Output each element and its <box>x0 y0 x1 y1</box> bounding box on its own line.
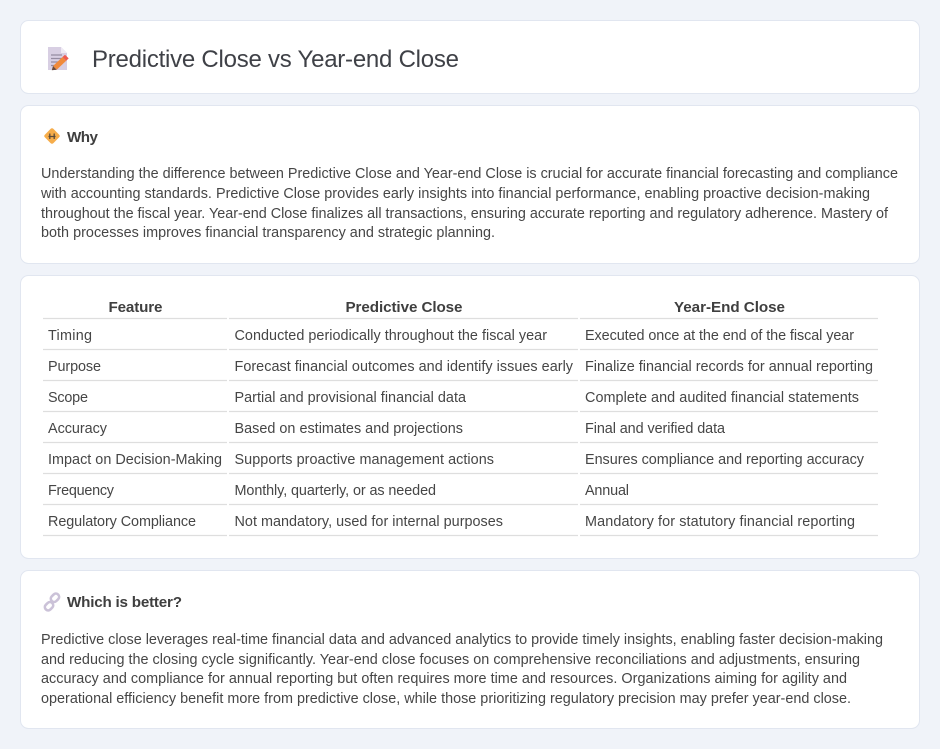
row: regulatory compliance: Not mandatory, used for internal purposes <box>234 514 503 530</box>
row: timing: Timing <box>48 328 92 344</box>
row: impact on decision-making <box>48 452 865 468</box>
row: regulatory compliance: Mandatory for statutory financial reporting <box>585 514 855 530</box>
row: scope: Scope <box>48 390 88 406</box>
title: Predictive Close vs Year-end Close <box>92 46 459 73</box>
text block: why: Understanding the difference between Predictive Close and Year-end Close is crucial for accurate financial forecasting and compliance <box>41 166 898 182</box>
row: timing: Executed once at the end of the fiscal year <box>585 328 854 344</box>
row: frequency: Frequency <box>48 483 115 499</box>
row: regulatory compliance: Regulatory Compliance <box>48 514 196 530</box>
row: regulatory compliance <box>48 514 855 530</box>
panel: header <box>20 20 920 94</box>
table header <box>108 299 785 316</box>
row: accuracy: Based on estimates and projections <box>234 421 463 437</box>
heading: why: Why <box>67 129 99 146</box>
row: frequency <box>48 483 629 499</box>
text block: which is better: operational efficiency benefit more from predictive close, while those prioritizing regulatory precision may prefer year-end close. <box>41 691 851 707</box>
row: purpose: Purpose <box>48 359 101 375</box>
row: timing <box>48 328 854 344</box>
text block: which is better <box>41 632 883 707</box>
table header: Predictive Close <box>346 299 462 316</box>
row: scope: Complete and audited financial statements <box>585 390 859 406</box>
text block: which is better: Predictive close leverages real-time financial data and advanced analytics to provide timely insights, enabling faster decision-making <box>41 632 883 648</box>
panel: comparison table <box>20 276 920 558</box>
table header: Year-End Close <box>674 299 785 316</box>
text block: which is better: and reducing the closing cycle significantly. Year-end close focuses on comprehensive reconciliations and adjustments, ensuring <box>41 652 860 668</box>
row: timing: Conducted periodically throughout the fiscal year <box>234 328 547 344</box>
panel: why <box>20 106 920 264</box>
row: impact on decision-making: Ensures compliance and reporting accuracy <box>585 452 865 468</box>
row: scope <box>48 390 859 406</box>
text block: why: with accounting standards. Predictive Close provides early insights into financial performance, enabling proactive decision-making <box>40 186 870 202</box>
panel: which is better <box>20 570 920 728</box>
heading: which is better: Which is better? <box>67 594 182 611</box>
icon: link <box>44 592 60 612</box>
text block: why <box>40 166 898 241</box>
table header: Feature <box>108 299 162 316</box>
row: accuracy: Final and verified data <box>585 421 725 437</box>
icon: warning diamond <box>44 128 60 144</box>
row: purpose <box>48 359 873 375</box>
text block: why: both processes improves financial transparency and strategic planning. <box>41 225 495 241</box>
row: scope: Partial and provisional financial data <box>234 390 466 406</box>
row: frequency: Annual <box>585 483 629 499</box>
row: impact on decision-making: Supports proactive management actions <box>234 452 494 468</box>
text block: which is better: accuracy and compliance for annual reporting but often requires more time and resources. Organizations aiming for agility and <box>41 671 847 687</box>
row: accuracy: Accuracy <box>48 421 108 437</box>
row: accuracy <box>48 421 725 437</box>
row: impact on decision-making: Impact on Decision-Making <box>48 452 222 468</box>
row: purpose: Forecast financial outcomes and identify issues early <box>234 359 574 375</box>
row: purpose: Finalize financial records for annual reporting <box>585 359 873 375</box>
icon: document with pencil <box>48 47 69 70</box>
text block: why: throughout the fiscal year. Year-end Close finalizes all transactions, ensuring accurate reporting and regulatory adherence. Mastery of <box>41 206 889 222</box>
row: frequency: Monthly, quarterly, or as needed <box>234 483 436 499</box>
